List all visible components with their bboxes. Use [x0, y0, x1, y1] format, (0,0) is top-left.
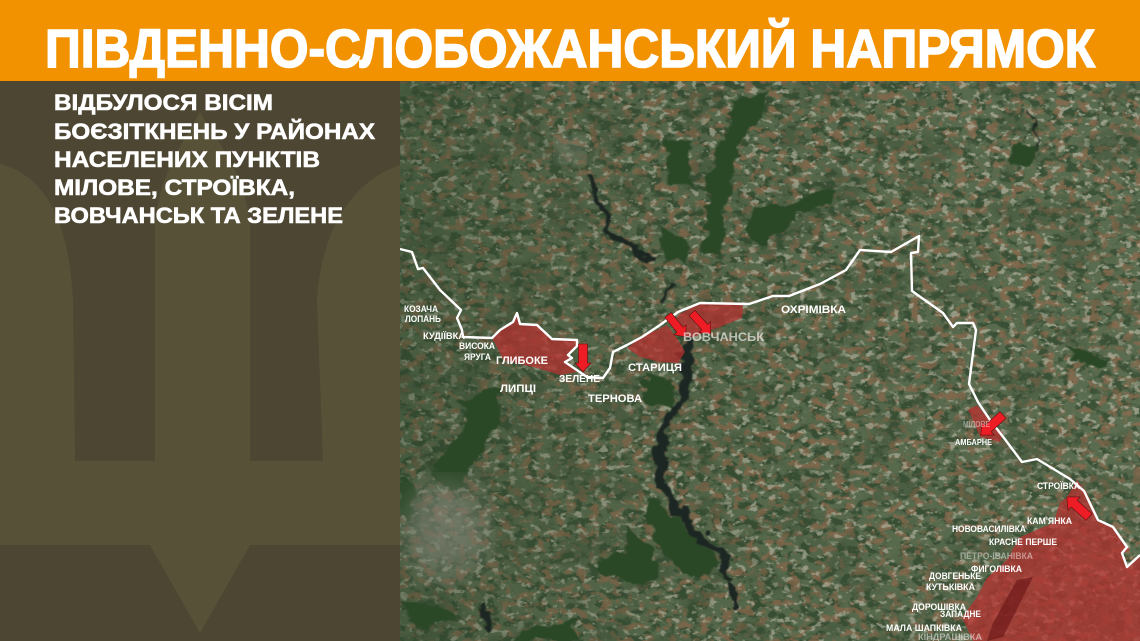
settlement labels: МАЛА ШАПКІВКА	[886, 623, 962, 633]
header banner	[0, 0, 1140, 81]
summary text: ВІДБУЛОСЯ ВІСІМ	[54, 90, 273, 115]
arrow: Vovchansk east	[688, 310, 711, 334]
settlement labels: ДОРОШІВКА	[912, 602, 966, 612]
arrow: Zelene	[575, 344, 591, 372]
summary text	[54, 90, 375, 228]
settlement labels: ПЕТРО-ІВАНІВКА	[960, 551, 1033, 561]
settlement labels: ЯРУГА	[464, 352, 491, 362]
arrow: Vovchansk west	[664, 312, 686, 337]
settlement labels: ТЕРНОВА	[588, 393, 642, 405]
settlement labels: КОЗАЧА	[404, 304, 438, 314]
settlement labels: КУДІЇВКА	[423, 331, 466, 341]
arrow: Milove	[980, 411, 1006, 436]
summary text: НАСЕЛЕНИХ ПУНКТІВ	[54, 147, 320, 172]
occupied zone: Vovchansk	[675, 303, 743, 337]
settlement labels: ЛОПАНЬ	[405, 314, 441, 324]
summary text: МІЛОВЕ, СТРОЇВКА,	[54, 175, 295, 200]
settlement labels: ВИСОКА	[459, 341, 495, 351]
settlement labels: СТРОЇВКА	[1037, 481, 1080, 491]
occupied zone: Hlyboke	[492, 313, 577, 375]
settlement labels: ОХРІМІВКА	[781, 304, 846, 316]
settlement labels: КУТЬКІВКА	[926, 582, 975, 592]
settlement labels: АМБАРНЕ	[955, 437, 992, 447]
summary text: БОЄЗІТКНЕНЬ У РАЙОНАХ	[54, 119, 375, 144]
field texture	[400, 81, 1140, 641]
occupied zone: Starytsia	[627, 325, 685, 363]
occupied zone: south-east	[962, 480, 1140, 641]
settlement labels: НОВОВАСИЛІВКА	[952, 524, 1026, 534]
settlement labels: ДОВГЕНЬКЕ	[929, 571, 981, 581]
settlement labels: КРАСНЕ ПЕРШЕ	[989, 537, 1057, 547]
darker forest strip in zone	[987, 577, 1033, 641]
settlement labels: ЗЕЛЕНЕ	[559, 373, 600, 385]
settlement labels: ЛИПЦІ	[500, 383, 536, 395]
occupied zone: Milove	[968, 405, 1003, 442]
city: Kharkiv outskirts	[403, 482, 487, 578]
settlement labels: КАМ'ЯНКА	[1027, 516, 1072, 526]
left panel	[0, 81, 400, 641]
settlement labels: ЗАПАДНЕ	[940, 609, 981, 619]
settlement labels: ГЛИБОКЕ	[496, 355, 548, 367]
settlement labels: ФИГОЛІВКА	[971, 564, 1022, 574]
front line	[400, 236, 1140, 567]
forests and reservoir	[400, 87, 1108, 641]
settlement labels: МІЛОВЕ	[963, 420, 991, 429]
trident emblem background	[0, 112, 400, 633]
settlement labels	[404, 304, 1080, 641]
arrow: Stroivka	[1066, 496, 1092, 521]
settlement labels: СТАРИЦЯ	[628, 362, 682, 374]
summary text: ВОВЧАНСЬК ТА ЗЕЛЕНЕ	[54, 203, 343, 228]
town in the north	[556, 138, 584, 162]
settlement labels: ВОВЧАНСЬК	[683, 330, 765, 344]
satellite map	[400, 81, 1140, 641]
